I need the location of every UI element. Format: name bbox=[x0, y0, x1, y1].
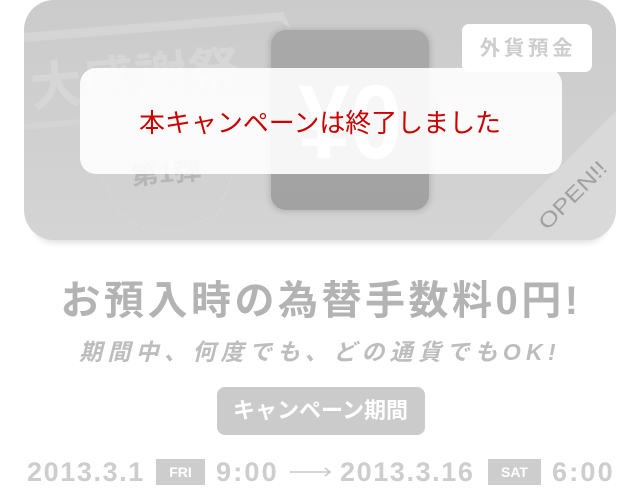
start date: 2013.3.1 bbox=[27, 457, 145, 487]
end time: 6:00 bbox=[552, 457, 615, 487]
grey card: ¥0 bbox=[298, 64, 402, 181]
date range bbox=[27, 457, 615, 487]
end date: 2013.3.16 bbox=[340, 457, 475, 487]
campaign ended overlay: 本キャンペーンは終了しました bbox=[139, 108, 501, 138]
open corner ribbon: OPEN!! bbox=[534, 157, 612, 235]
currency tag: 外貨預金 bbox=[480, 37, 576, 60]
ticket illustration bbox=[24, 12, 291, 186]
campaign period badge: キャンペーン期間 bbox=[233, 398, 408, 423]
friday tag: FRI bbox=[169, 464, 192, 480]
subheading: 期間中、何度でも、どの通貨でもOK! bbox=[79, 339, 561, 365]
ticket illustration: 大感謝祭 bbox=[28, 42, 242, 118]
saturday tag: SAT bbox=[501, 464, 528, 480]
headline: お預入時の為替手数料0円! bbox=[60, 279, 582, 323]
banner panel bbox=[24, 0, 616, 244]
campaign period badge bbox=[217, 387, 425, 435]
ticket illustration: 第1弾 bbox=[130, 157, 202, 191]
currency tag bbox=[462, 24, 592, 72]
start time: 9:00 bbox=[216, 457, 279, 487]
open corner ribbon bbox=[540, 112, 616, 228]
arrow bbox=[290, 468, 331, 476]
campaign ended overlay bbox=[80, 68, 562, 174]
friday tag bbox=[156, 459, 205, 485]
saturday tag bbox=[488, 459, 541, 485]
grey card bbox=[269, 29, 431, 212]
